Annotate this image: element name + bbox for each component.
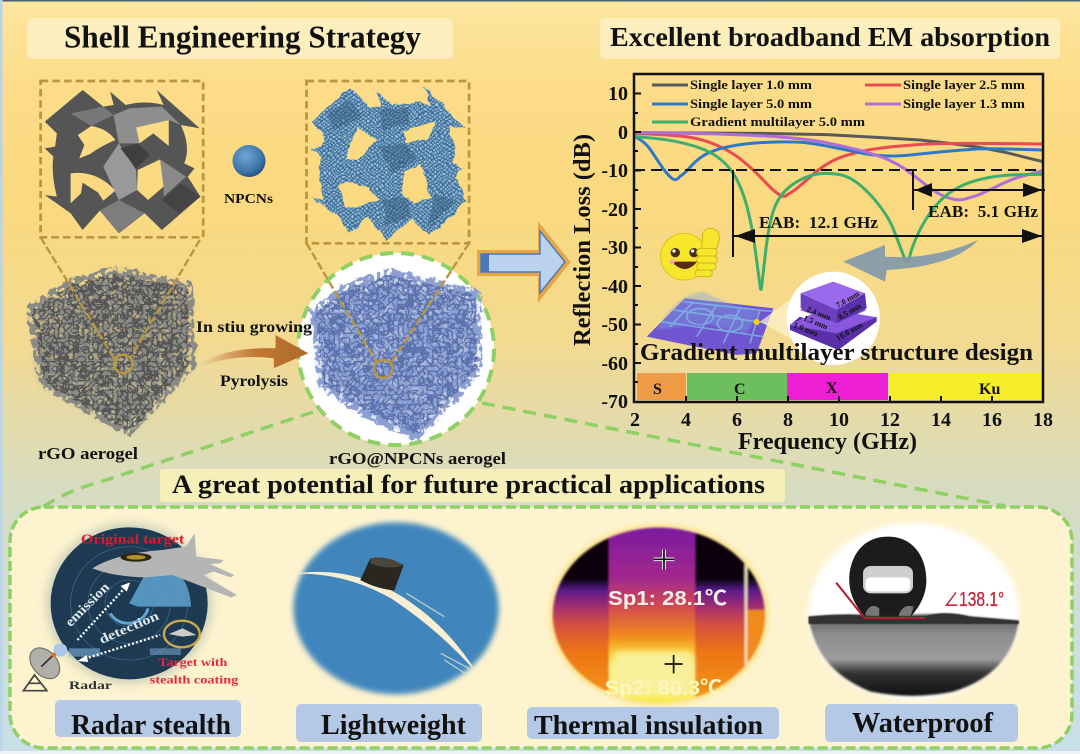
image: radar stealth: Radar — [69, 678, 113, 692]
multilayer structure illustration — [647, 272, 880, 365]
heading: Excellent broadband EM absorption — [600, 18, 1060, 59]
icon: NPCN sphere — [232, 145, 266, 177]
image: radar stealth — [23, 523, 239, 692]
image: radar stealth: Original target — [81, 532, 185, 546]
x axis tick labels — [630, 409, 1053, 431]
y axis tick labels: -50 — [601, 314, 628, 336]
frequency band strip: X — [826, 380, 838, 397]
EAB bracket: 12.1 GHz — [733, 170, 1042, 257]
image: water contact angle — [809, 523, 1019, 700]
labels on layered structure — [792, 289, 865, 343]
legend: Single layer 2.5 mm — [903, 78, 1026, 92]
legend: Gradient multilayer 5.0 mm — [690, 115, 866, 129]
x axis tick labels: 12 — [880, 409, 900, 431]
image: radar stealth: Target with — [158, 657, 228, 669]
heading: Shell Engineering Strategy: Shell Engineering Strategy — [64, 18, 421, 54]
frequency band strip: Ku — [979, 381, 1000, 398]
x axis tick labels: 18 — [1033, 409, 1053, 431]
label: Thermal insulation: Thermal insulation — [534, 710, 763, 740]
y axis tick labels: -40 — [601, 276, 628, 298]
label: Lightweight: Lightweight — [321, 709, 466, 741]
label: rGO aerogel: rGO aerogel — [38, 444, 138, 463]
caption: Gradient multilayer structure design: Gradient multilayer structure design — [640, 340, 1033, 366]
EAB bracket: 5.1 GHz — [913, 170, 1045, 221]
EAB bracket: 5.1 GHz: EAB: 5.1 GHz — [928, 202, 1038, 221]
legend: Single layer 1.3 mm — [903, 97, 1026, 111]
x axis tick labels: 14 — [931, 409, 951, 431]
chart: reflection loss — [570, 74, 1053, 455]
image: radar stealth: detection — [97, 608, 162, 647]
y axis tick labels: 0 — [618, 122, 628, 144]
inset: NPCN-coated framework detail — [307, 81, 469, 243]
legend — [652, 78, 1026, 129]
legend: Single layer 1.0 mm — [690, 78, 813, 92]
plane — [92, 533, 237, 597]
image: radar stealth: stealth coating — [150, 674, 239, 686]
reference line at -10 dB — [634, 169, 1043, 171]
y axis tick labels: -10 — [601, 160, 628, 182]
arrow: translucent blue pointing to structure — [843, 240, 978, 282]
image: thermal infrared: Sp2: 80.3℃ — [605, 677, 722, 700]
labels on layered structure: 2.4 mm — [805, 305, 832, 322]
y axis tick labels: -20 — [601, 199, 628, 221]
coated aerogel cube — [310, 268, 482, 442]
image: water contact angle: ∠138.1° — [944, 589, 1004, 611]
label: Radar stealth: Radar stealth — [71, 709, 231, 741]
x axis tick labels: 16 — [982, 409, 1002, 431]
curves — [635, 133, 1042, 289]
labels on layered structure: 10.0 mm — [834, 320, 865, 343]
zoom guide lines to framework insets — [41, 237, 469, 378]
labels on layered structure: 1.5 mm — [802, 314, 829, 331]
frequency band strip: C — [734, 381, 746, 398]
x axis tick labels: 10 — [829, 409, 849, 431]
radar dish — [53, 643, 67, 657]
y axis tick labels: -60 — [601, 353, 628, 375]
frequency band strip: S — [653, 381, 662, 398]
plot frame — [634, 74, 1043, 402]
label: Pyrolysis: Pyrolysis — [220, 373, 288, 390]
labels on layered structure: 1.0 mm — [792, 321, 819, 338]
y axis tick labels: -70 — [601, 391, 628, 413]
image: radar stealth: emission — [62, 579, 113, 629]
labels on layered structure: 7.0 mm — [834, 289, 861, 310]
x axis tick labels: 2 — [630, 409, 640, 431]
label: Waterproof — [825, 704, 1018, 742]
x axis tick labels: 6 — [732, 409, 742, 431]
heading: Excellent broadband EM absorption: Excellent broadband EM absorption — [610, 22, 1050, 52]
label: rGO@NPCNs aerogel: rGO@NPCNs aerogel — [329, 449, 506, 468]
rGO aerogel cube — [26, 267, 196, 437]
image: thermal infrared: Sp1: 28.1℃ — [608, 587, 727, 610]
EAB bracket: 12.1 GHz: EAB: 12.1 GHz — [759, 213, 878, 232]
label: In stiu growing: In stiu growing — [196, 319, 312, 336]
white circle highlight around coated aerogel — [298, 253, 494, 445]
icon: thumbs-up smiley — [661, 228, 719, 280]
legend: Single layer 5.0 mm — [690, 97, 813, 111]
inset: rGO framework detail — [41, 81, 203, 237]
y axis tick labels: -30 — [601, 237, 628, 259]
frequency band strip — [637, 373, 1041, 400]
y axis tick labels: 10 — [608, 83, 628, 105]
x axis tick labels: 8 — [783, 409, 793, 431]
axis ticks — [634, 94, 992, 402]
image: thermal infrared — [549, 524, 771, 706]
arrow: big blue to chart — [479, 227, 568, 297]
label: Waterproof: Waterproof — [852, 708, 994, 739]
label: Lightweight — [296, 704, 482, 742]
y axis tick labels — [601, 83, 628, 413]
arrow: growth step — [198, 335, 308, 368]
y axis title: Reflection Loss (dB) — [570, 134, 596, 346]
connector lines to applications panel — [36, 403, 1005, 512]
panel: practical applications — [10, 507, 1072, 748]
labels on layered structure: 8.5 mm — [836, 301, 863, 322]
x axis title: Frequency (GHz) — [738, 429, 917, 455]
x axis tick labels: 4 — [681, 409, 691, 431]
label: NPCNs: NPCNs — [224, 192, 274, 207]
heading: future practical applications: A great potential for future practical applications — [172, 470, 765, 499]
image: lightweight aerogel on feather — [293, 522, 499, 694]
